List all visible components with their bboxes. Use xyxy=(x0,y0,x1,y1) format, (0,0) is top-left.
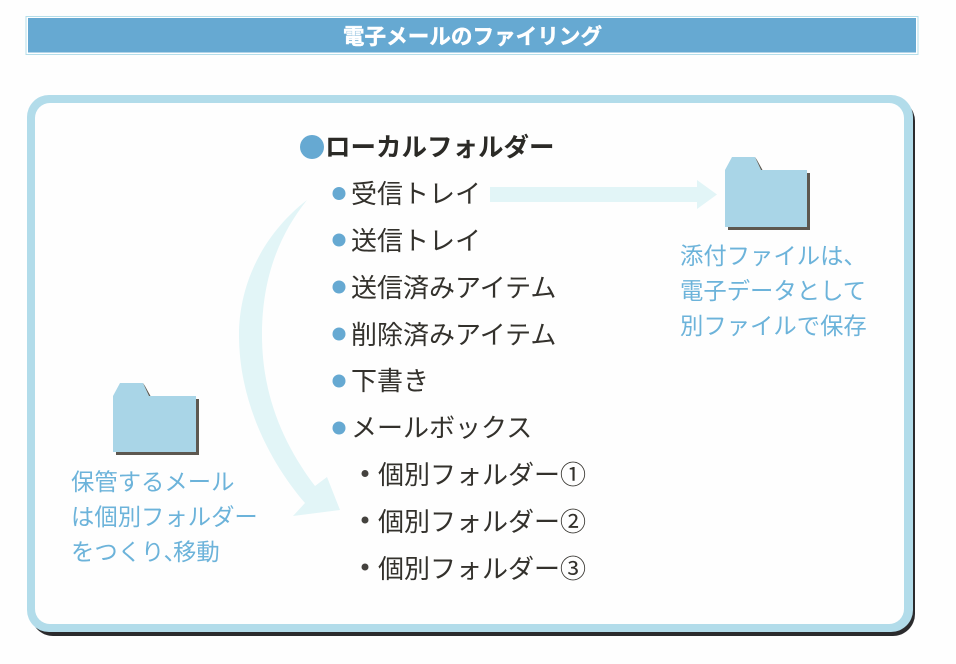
icon: attachment folder xyxy=(725,157,810,230)
list item: drafts: 下書き xyxy=(351,366,429,396)
note: mail storage xyxy=(71,469,258,565)
arrow: inbox to attachment folder xyxy=(490,180,717,209)
note: attachments: 別ファイルで保存 xyxy=(680,313,867,339)
arrow: curved arrow to individual folders xyxy=(239,200,340,516)
note: mail storage: は個別フォルダー xyxy=(71,504,258,530)
list: folder items xyxy=(332,179,586,584)
note: attachments: 添付ファイルは、 xyxy=(680,243,867,269)
sub item: folder 1: 個別フォルダー① xyxy=(378,460,586,490)
list item: inbox: 受信トレイ xyxy=(351,179,481,209)
list item: sent items: 送信済みアイテム xyxy=(351,273,556,303)
note: attachments xyxy=(680,243,867,339)
list item: mailbox: メールボックス xyxy=(351,413,532,443)
sub item: folder 3: 個別フォルダー③ xyxy=(378,554,586,584)
panel: local folder frame xyxy=(27,95,915,636)
list item: sent tray: 送信トレイ xyxy=(351,226,481,256)
icon: storage folder xyxy=(113,383,199,455)
sub item: folder 2: 個別フォルダー② xyxy=(378,507,586,537)
note: mail storage: 保管するメール xyxy=(71,469,234,495)
title banner xyxy=(26,16,918,54)
note: mail storage: 移動 xyxy=(173,539,220,565)
heading: local folder: ローカルフォルダー xyxy=(325,133,555,162)
note: attachments: 電子データとして xyxy=(680,278,866,304)
title text: 電子メールのファイリング xyxy=(343,24,602,49)
list item: deleted items: 削除済みアイテム xyxy=(351,320,556,350)
note: mail storage: をつくり、 xyxy=(71,539,187,565)
